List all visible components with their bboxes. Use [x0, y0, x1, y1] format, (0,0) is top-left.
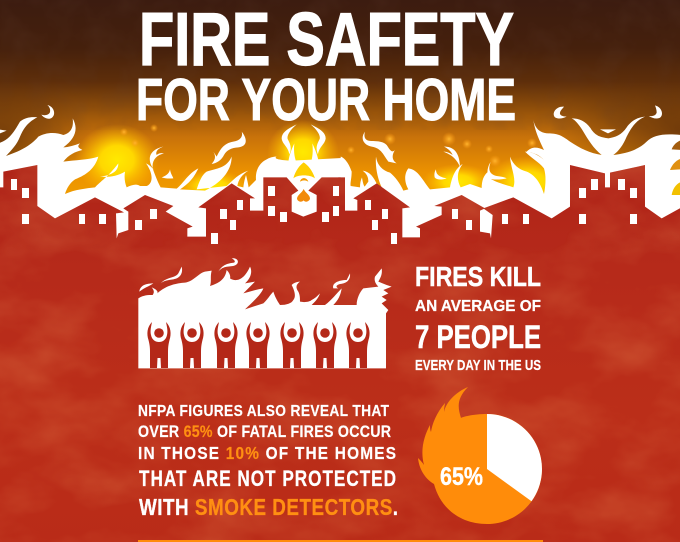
background: smoky sky texture [0, 0, 680, 130]
flame: upper lick [212, 132, 246, 164]
orange rule at bottom [138, 540, 543, 542]
small left lick [139, 283, 153, 292]
title [136, 0, 516, 133]
title line: for your home: FOR YOUR HOME [136, 67, 516, 133]
central flame [282, 124, 326, 202]
flame: twin curl left [282, 124, 297, 154]
background: sky gradient [0, 0, 680, 240]
burning town: right half [338, 105, 680, 542]
stat line 4: EVERY DAY IN THE US [415, 358, 541, 374]
flame block [138, 258, 392, 368]
person 4 [246, 322, 270, 368]
house windows [11, 179, 637, 244]
flame: top left tip [0, 129, 7, 134]
flame: twin curl right [311, 124, 326, 154]
paragraph line 5: WITH SMOKE DETECTORS. [139, 495, 398, 520]
burning town: left half [0, 105, 342, 542]
flame: right curl right [649, 105, 662, 119]
flame tail and orange disc [418, 387, 542, 524]
flame: small leaf [434, 169, 447, 179]
right floating lick [333, 273, 350, 288]
flame: yellow teardrop [293, 162, 315, 178]
paragraph line 2: OVER 65% OF FATAL FIRES OCCUR [138, 423, 391, 441]
person 7 [346, 322, 370, 368]
background: floating sparks [120, 124, 537, 167]
notches at far right edge [670, 140, 680, 195]
person 2 [180, 322, 204, 368]
person 5 [280, 322, 304, 368]
floating lick [161, 267, 182, 283]
red houses: left half [0, 165, 342, 542]
chart: flaming 65% pie [418, 387, 542, 524]
flame: centre diamond [600, 129, 616, 133]
flame: orange arch [300, 178, 308, 182]
person 1 [147, 322, 171, 368]
person 3 [214, 322, 238, 368]
flames: right silhouette [341, 117, 680, 240]
background: mottled smoke texture [0, 150, 680, 542]
paragraph line 1: NFPA FIGURES ALSO REVEAL THAT [138, 402, 389, 420]
background: darker sky at the edges [0, 60, 680, 210]
flame: crescent [443, 147, 460, 167]
pie label: 65% [440, 463, 483, 491]
paragraph line 4: THAT ARE NOT PROTECTED [139, 467, 396, 492]
stat line 2: AN AVERAGE OF [415, 298, 541, 315]
flame: upper wave lick [363, 132, 397, 163]
text block: NFPA smoke detector figures [138, 402, 398, 520]
flame: left curl [41, 105, 54, 119]
top curl [218, 258, 238, 272]
flame: orange window flame [297, 189, 310, 202]
person 6 [313, 322, 337, 368]
icon: seven people in flames [138, 258, 392, 368]
background: fire glows [75, 120, 572, 208]
flame: floating leaf [162, 169, 173, 179]
stat line 1: FIRES KILL [415, 261, 541, 292]
flame: inner left [288, 143, 297, 163]
paragraph line 3: IN THOSE 10% OF THE HOMES [138, 444, 396, 463]
flame: inner right [311, 143, 319, 163]
block silhouette [138, 267, 392, 368]
flames: left silhouette [0, 117, 342, 240]
stat line 3: 7 PEOPLE [415, 319, 541, 355]
flame: side lick [487, 162, 507, 180]
statistic: fires kill seven people [415, 261, 541, 374]
flame: right curl left [554, 107, 567, 119]
white slice [487, 414, 542, 501]
red houses: right half [338, 165, 680, 542]
